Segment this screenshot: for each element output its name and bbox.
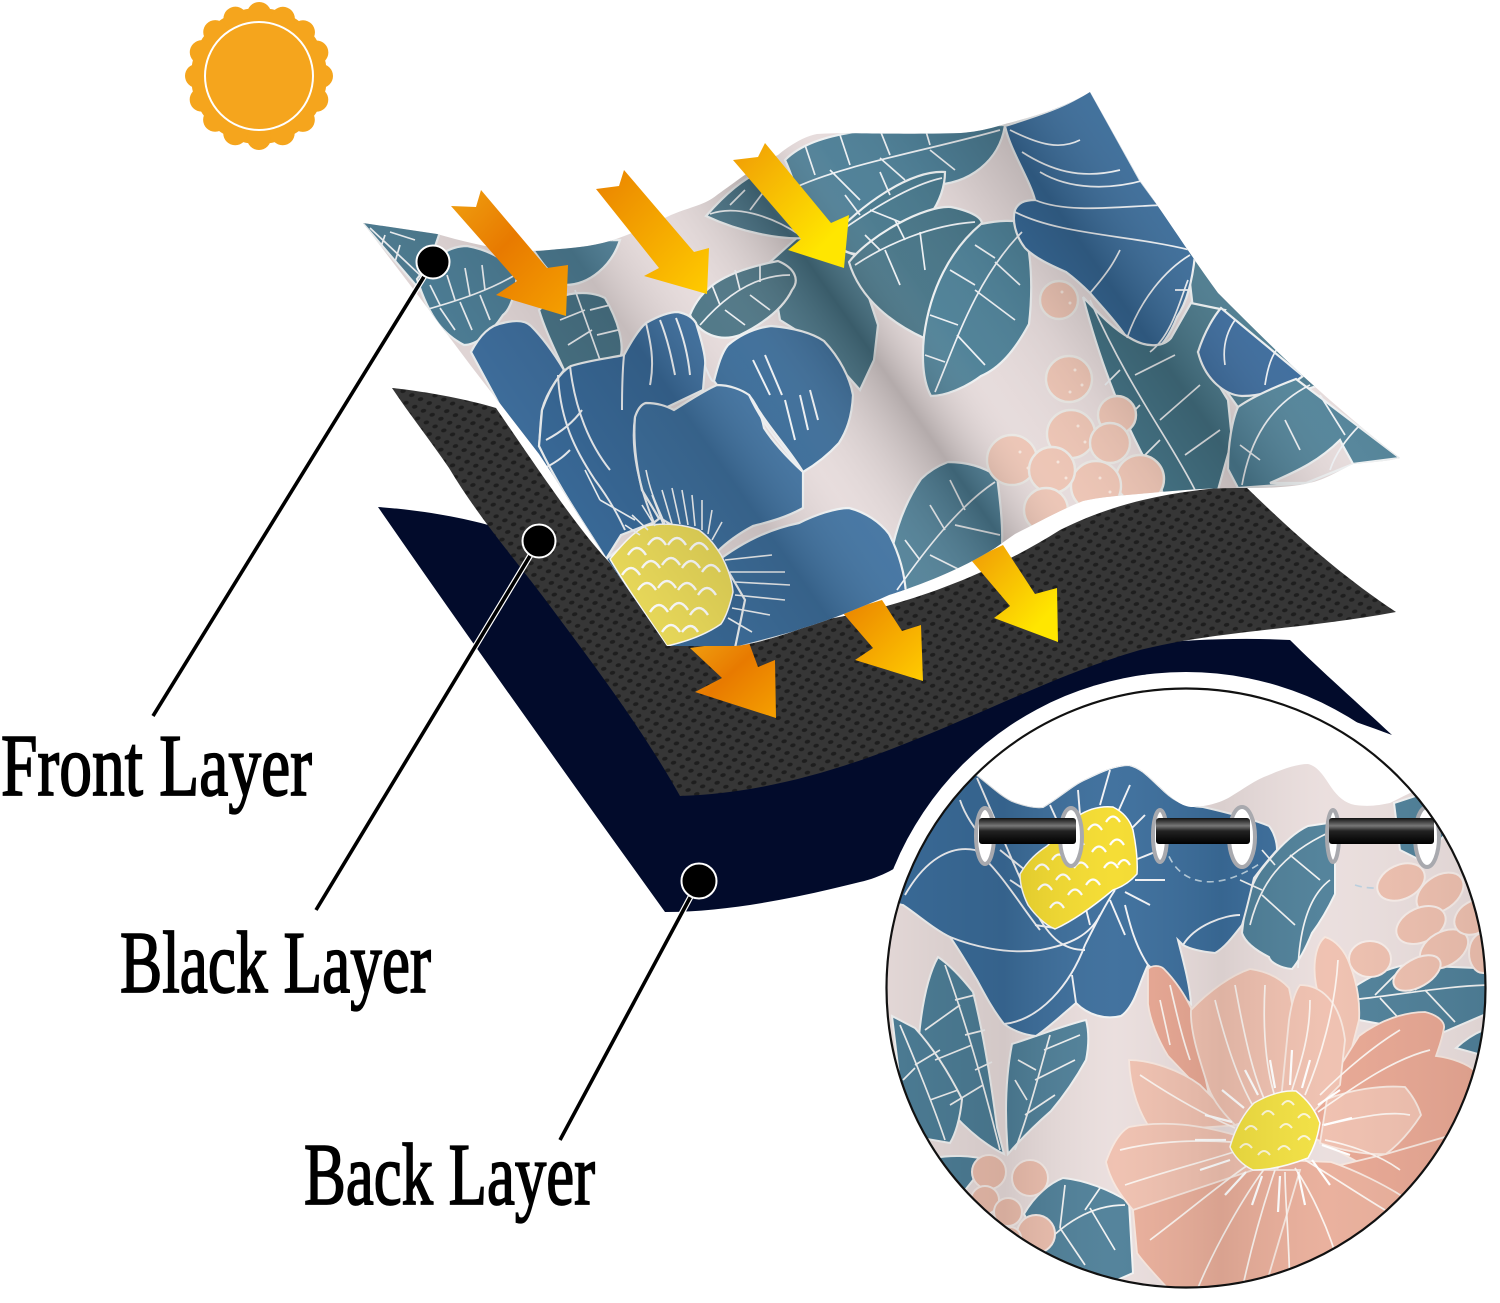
curtain: teal leaves xyxy=(892,788,1500,1292)
callout: front layer leader xyxy=(153,246,450,716)
white spikes round the centre xyxy=(585,470,790,632)
curtain: blue flower xyxy=(880,765,1277,1036)
inset: hanging curtain close-up xyxy=(870,672,1500,1303)
curtain: pink flower centre xyxy=(1230,1091,1320,1170)
icon: sun xyxy=(191,8,327,144)
curtain: stitched seam xyxy=(1168,851,1374,889)
berry speckles xyxy=(1018,290,1112,494)
berries xyxy=(987,281,1164,532)
petal outlines and veins xyxy=(545,318,818,530)
curtain: blue flower veins xyxy=(905,770,1240,1024)
curtain: pink flower spikes xyxy=(1195,1050,1352,1212)
fold shading xyxy=(395,92,1374,646)
curtain: berries xyxy=(971,856,1500,1253)
label: front layer: Front Layer xyxy=(1,718,312,815)
label: black layer: Black Layer xyxy=(120,915,431,1012)
yellow flower centre xyxy=(610,524,733,646)
arrows: lower set passing through black layer xyxy=(690,545,1058,718)
black layer: dotted fabric xyxy=(392,388,1396,796)
curtain rod and grommets xyxy=(976,807,1439,867)
curtain: leaf veins xyxy=(900,832,1495,1265)
arrows: upper set striking front layer xyxy=(451,143,849,316)
callout: back layer leader xyxy=(560,864,716,1140)
label: back layer: Back Layer xyxy=(304,1127,595,1224)
yellow centre scales xyxy=(622,538,720,632)
curtain: pink flower veins xyxy=(1120,960,1430,1300)
back layer: navy fabric xyxy=(378,507,1392,912)
front layer: floral fabric xyxy=(350,80,1420,660)
callout: black layer leader xyxy=(316,524,556,910)
curtain: fold shading xyxy=(880,760,1500,1303)
petals: big blue flower xyxy=(471,312,906,648)
leaves: front layer foliage xyxy=(360,90,1400,596)
leaf veins xyxy=(370,128,1360,590)
curtain: pink flower stamens xyxy=(1240,1101,1310,1155)
curtain: yellow centre xyxy=(1020,807,1137,929)
curtain: pink flower xyxy=(1106,937,1477,1303)
curtain: yellow centre scales xyxy=(1035,816,1130,908)
